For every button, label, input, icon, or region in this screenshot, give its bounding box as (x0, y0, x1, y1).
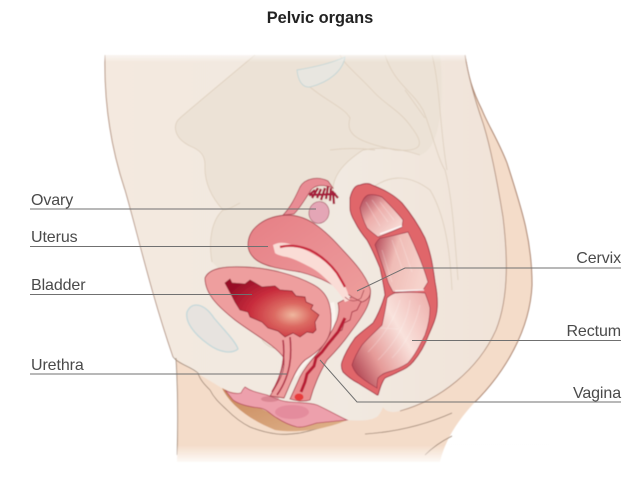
label: Bladder: Bladder (31, 277, 86, 294)
labia shading (275, 405, 309, 419)
body: front and inner contour (105, 55, 506, 411)
uterine cavity (280, 246, 345, 287)
vaginal opening (294, 394, 304, 400)
ovary and fallopian tube (283, 178, 338, 226)
body: outer back contour (465, 55, 532, 402)
bladder (205, 267, 331, 398)
label: Urethra: Urethra (31, 357, 84, 374)
rectum middle segment (375, 232, 428, 292)
bladder interior (225, 279, 319, 337)
vagina tube (290, 289, 370, 401)
label: Ovary: Ovary (31, 192, 73, 209)
uterine cavity halo (273, 243, 350, 302)
cervix fold (345, 290, 364, 301)
faint pelvic anatomy: contour (175, 55, 420, 348)
body: pale interior (105, 55, 506, 421)
top fade (100, 50, 500, 62)
label: Uterus: Uterus (31, 229, 78, 246)
urethra (272, 337, 291, 395)
faint pelvic anatomy: abdominal contents (175, 55, 442, 300)
vagina and cervix (290, 289, 370, 401)
body: peach skin and thigh (176, 55, 532, 462)
pubic bone (187, 305, 238, 352)
shadow below vulva (222, 388, 347, 431)
label: Cervix: Cervix (576, 250, 621, 267)
uterus wall (248, 215, 371, 302)
rectum ridges (380, 226, 424, 291)
vulva (225, 387, 347, 427)
bladder wall (205, 267, 331, 398)
body: thigh and crease lines (173, 357, 452, 455)
uterus (248, 215, 371, 302)
rectum folds (366, 200, 420, 360)
label: Cervix (357, 250, 621, 291)
illustration: body cross-section (100, 50, 550, 480)
rectum wall (341, 184, 437, 395)
label: Rectum: Rectum (566, 323, 621, 340)
ovary (306, 199, 332, 226)
upper bone (297, 57, 345, 87)
gap between bladder and vagina (294, 302, 336, 378)
lower fade (100, 445, 550, 465)
rectum (341, 184, 437, 395)
label: Vagina: Vagina (573, 385, 621, 402)
fimbriae (309, 186, 338, 204)
vaginal rugae (333, 300, 362, 340)
rectum lower segment (352, 292, 430, 388)
vaginal canal (301, 318, 345, 392)
body: white cut-out below front contour (100, 190, 176, 480)
label: Vagina (320, 360, 621, 402)
title: Pelvic organs (267, 9, 373, 27)
faint pelvic anatomy: bowel loop lines (310, 55, 458, 290)
labia (225, 387, 347, 427)
fallopian tube (283, 178, 333, 215)
rectum upper segment (360, 195, 403, 237)
